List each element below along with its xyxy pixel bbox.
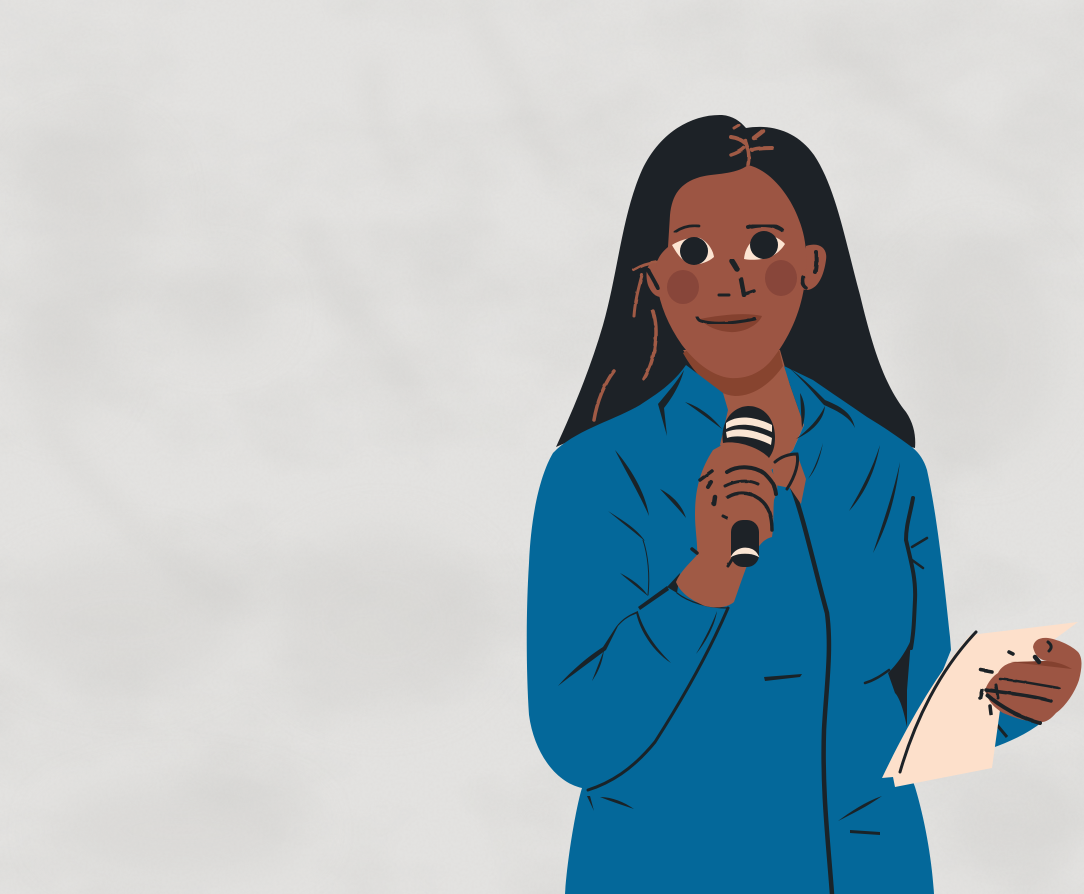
neck and chest skin [683,350,804,480]
eyes [672,231,785,265]
hand details [692,467,776,566]
ear: left [646,263,668,297]
cheeks [667,260,797,304]
mouth [697,314,762,332]
sleeve folds, left arm [558,450,882,835]
dark shadow under right arm [888,640,911,727]
neck shadow [683,345,783,396]
face [656,165,806,378]
cuff of holding arm [985,700,1042,748]
hair strands [594,125,772,420]
hand holding paper [985,638,1082,723]
shirt [527,365,951,894]
hair [556,115,915,448]
sheets of paper [882,622,1078,787]
collar folds on shirt [658,367,900,553]
fingers behind microphone hand [772,454,806,504]
microphone [722,406,775,567]
eyebrows [675,225,782,232]
nose marks [719,261,754,295]
hand holding microphone with forearm [676,445,777,607]
ear: right [801,245,826,290]
ear details [648,252,816,288]
